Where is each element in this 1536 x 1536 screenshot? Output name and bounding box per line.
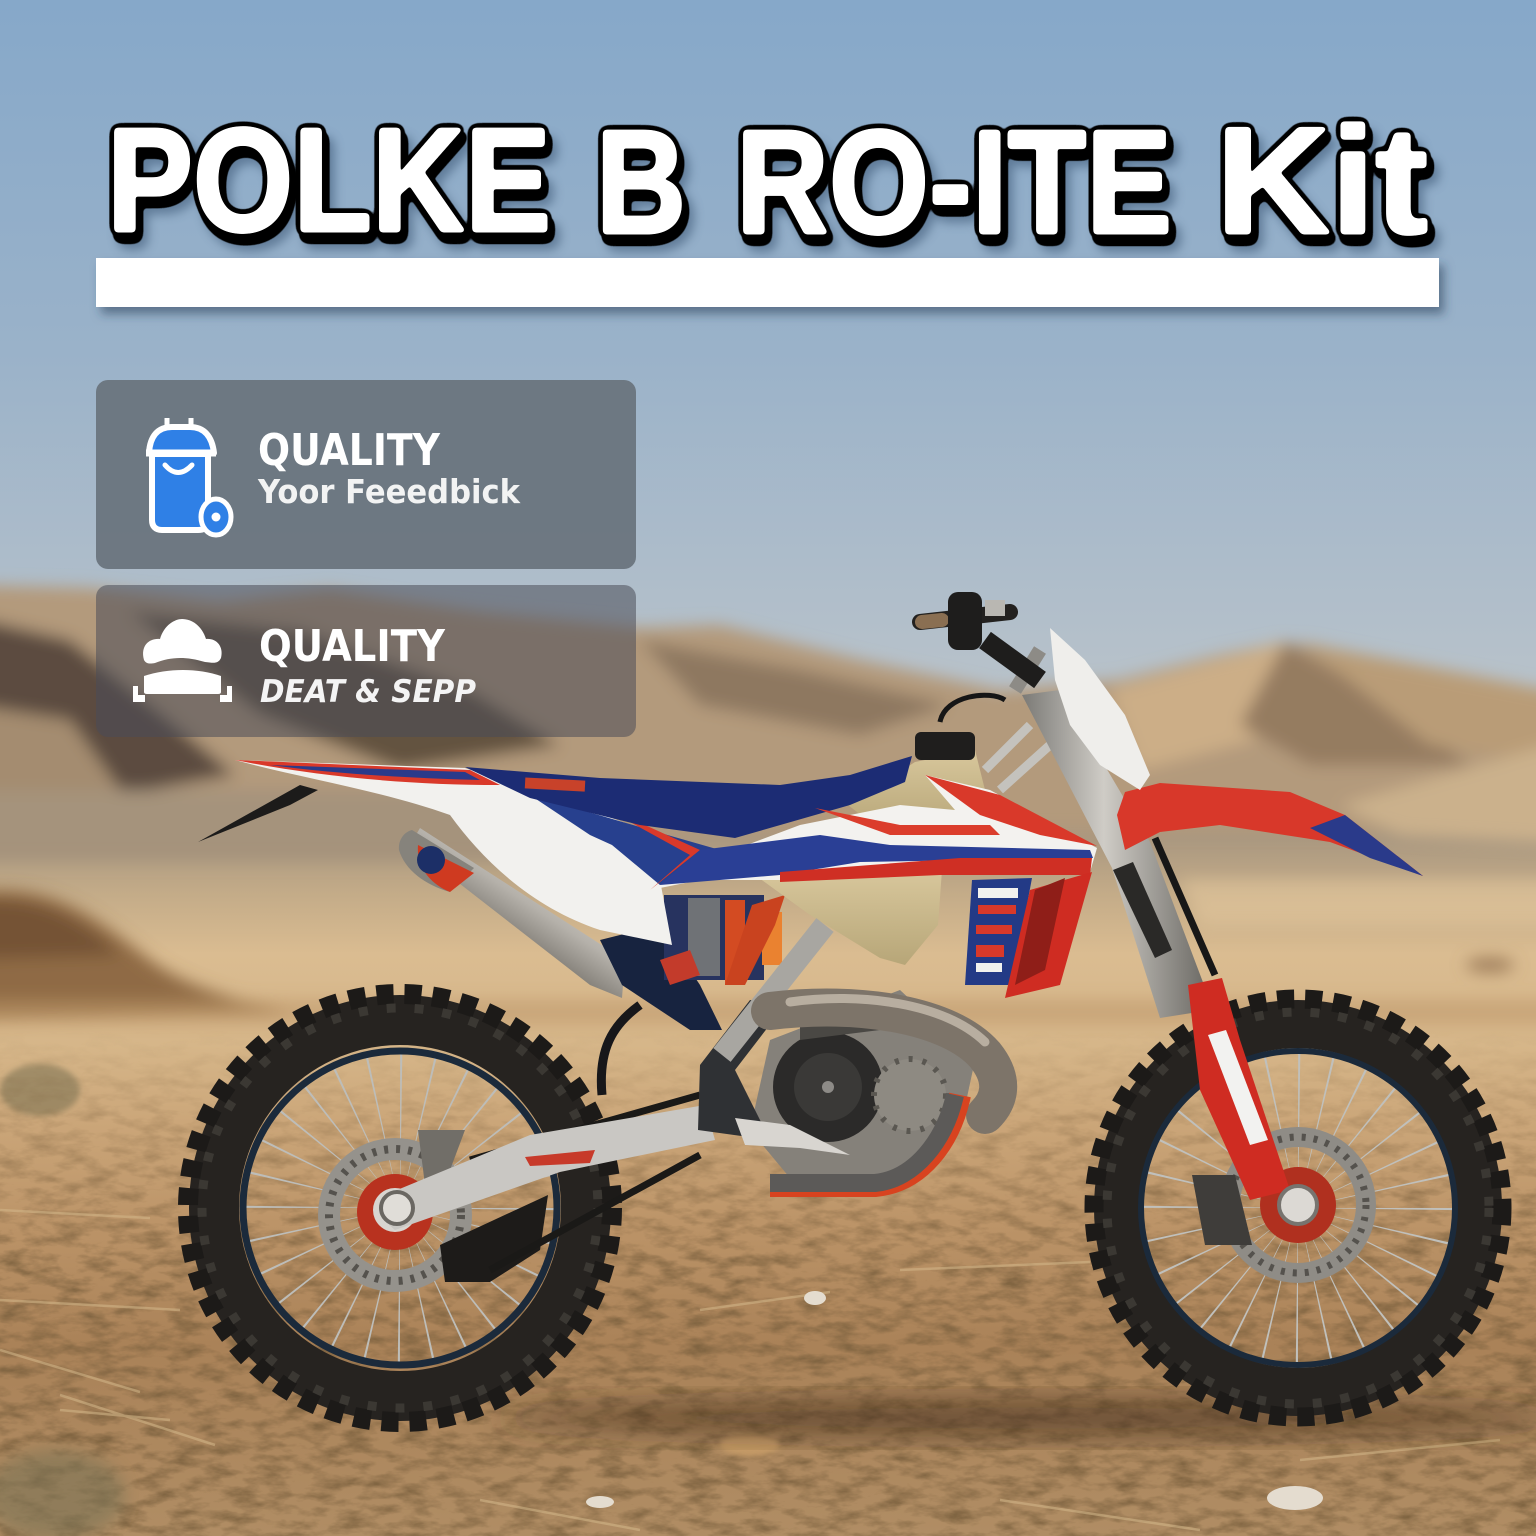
panel: quality feedback [96,380,636,569]
exhaust header highlight [790,999,985,1042]
handlebars and controls [920,592,1040,722]
swingarm accent [525,1150,595,1166]
ground shadow of the bike [500,1398,1536,1438]
panel subtext: Yoor Feeedbick [257,472,521,511]
frame plate [698,1000,785,1140]
footrest bracket [735,1118,850,1155]
lower rear plastic [600,925,722,1030]
rear axle [381,1192,413,1224]
icon: blue container [146,418,231,535]
frame tube [722,925,825,1055]
title: POLKE [107,98,551,263]
frame tubes near steering head [985,725,1050,790]
rear wheel [188,994,612,1422]
panel: deat and sepp [96,585,636,737]
panel subtext: DEAT & SEPP [260,674,476,710]
fuel tank [755,732,985,965]
side shroud graphics [650,775,1097,890]
title: Kit [1216,96,1428,266]
title: RO-ITE [736,100,1172,265]
swingarm [382,1105,715,1230]
muffler [399,828,625,998]
engine bay parts [660,895,785,985]
seat logo mark [525,777,585,792]
panel heading: QUALITY [258,425,441,476]
fork lettering block [1113,862,1172,958]
fork tube [1022,690,1204,1018]
exhaust lower pipe [770,1095,960,1186]
number plate [1050,628,1150,790]
fork guard mark [1208,1030,1268,1145]
rear tail and side panel [198,760,720,945]
fork brace [1155,838,1215,975]
title underline bar [96,258,1439,307]
exhaust header [770,1008,998,1115]
radiator panel [965,872,1092,998]
front wheel [1094,999,1502,1417]
panel heading: QUALITY [259,621,446,672]
engine [750,990,975,1178]
icon: white dome [133,619,232,702]
fork guard [1188,978,1290,1200]
front axle [1279,1186,1317,1224]
front fender [1117,783,1423,876]
motorcycle [188,592,1502,1422]
rear shock and chain [470,1005,700,1270]
title: B [596,100,686,265]
title [107,96,1428,266]
seat [465,756,912,838]
